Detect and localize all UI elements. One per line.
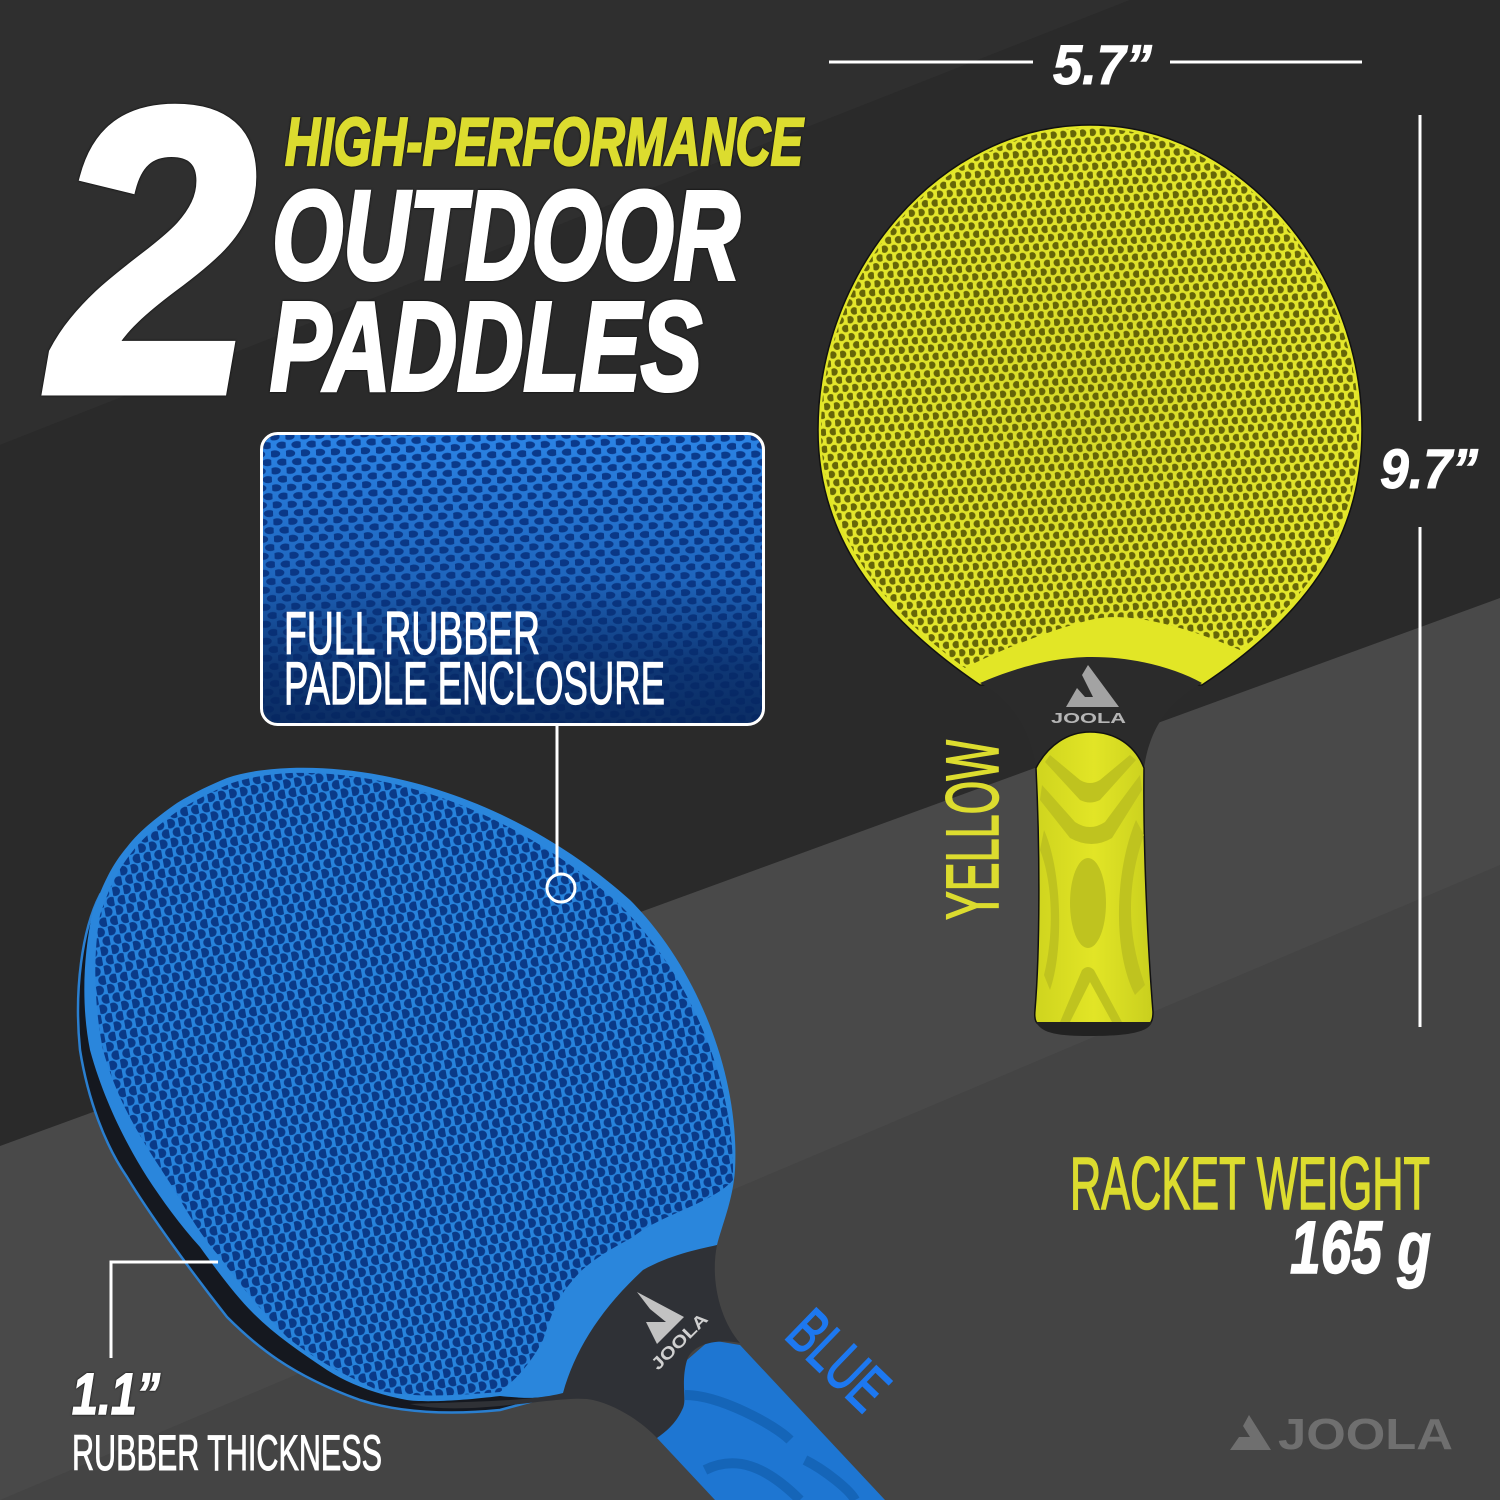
logo on yellow paddle: JOOLA <box>1051 710 1126 727</box>
blue paddle <box>70 760 885 1500</box>
brand logo: JOOLA <box>1278 1410 1453 1459</box>
paddle head yellow <box>818 125 1362 685</box>
dimpled surface <box>95 772 733 1396</box>
heading: outdoor paddles: PADDLES <box>270 276 702 417</box>
black neck <box>980 657 1202 768</box>
logo on blue paddle: JOOLA <box>647 1309 712 1374</box>
brand logo <box>1230 1410 1453 1459</box>
handle <box>1035 732 1153 1025</box>
black neck <box>410 1245 740 1438</box>
callout text <box>284 600 665 717</box>
thickness callout: 1.1” <box>72 1362 160 1427</box>
heading: high-performance: HIGH-PERFORMANCE <box>285 104 805 180</box>
height dimension 9.7: 9.7” <box>1380 437 1478 500</box>
width dimension 5.7: 5.7” <box>1053 33 1152 96</box>
logo on blue paddle <box>637 1292 712 1374</box>
racket weight <box>1070 1142 1431 1289</box>
logo on yellow paddle <box>1051 665 1126 727</box>
thickness callout: RUBBER THICKNESS <box>72 1425 382 1481</box>
callout photo panel <box>261 433 764 725</box>
heading: outdoor paddles <box>270 165 740 417</box>
callout text: FULL RUBBER <box>284 600 540 667</box>
handle <box>657 1340 885 1500</box>
label: blue: BLUE <box>773 1295 904 1425</box>
big number 2: 2 <box>46 24 256 477</box>
callout: full rubber paddle enclosure <box>261 433 764 725</box>
label: yellow: YELLOW <box>931 740 1014 920</box>
dimpled surface <box>810 120 1370 680</box>
heading: outdoor paddles: OUTDOOR <box>272 165 740 306</box>
callout text: PADDLE ENCLOSURE <box>284 650 665 717</box>
blue rim <box>84 768 735 1401</box>
thickness callout <box>72 1262 382 1481</box>
side rim <box>78 895 563 1413</box>
yellow paddle <box>810 120 1370 1036</box>
handle grooves <box>1040 755 1145 1022</box>
racket weight: 165 g <box>1290 1206 1431 1289</box>
handle grooves <box>685 1395 855 1500</box>
callout pointer line and circle <box>547 725 575 902</box>
